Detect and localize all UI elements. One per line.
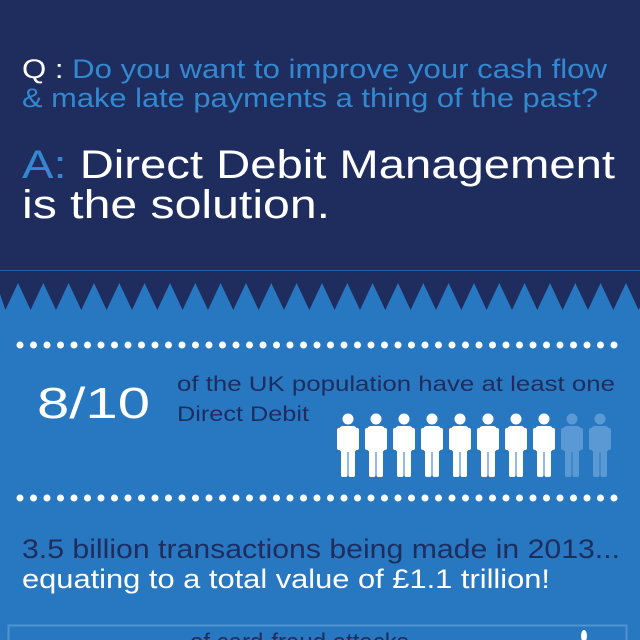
dotted divider top: [20, 342, 620, 348]
stat: transactions: [22, 534, 620, 594]
question text: Q : Do you want to improve your cash flow: [22, 54, 608, 84]
stat: transactions: equating to a total value of £1.1 trillion!: [22, 564, 550, 594]
stat: 8/10: [37, 373, 615, 428]
zigzag divider: [0, 283, 640, 320]
question text: [22, 54, 608, 113]
answer text: A: Direct Debit Management: [22, 143, 615, 187]
stat description: of the UK population have at least one: [177, 373, 615, 396]
stat: 8/10: 8/10: [37, 379, 150, 428]
icon: people pictogram 8 of 10: [337, 414, 611, 477]
panel: header question and answer: [0, 0, 640, 312]
answer text: [22, 143, 615, 227]
question text: & make late payments a thing of the past?: [22, 83, 598, 113]
stat: transactions: 3.5 billion transactions being made in 2013...: [22, 534, 620, 564]
panel: bottom box (cut off): [8, 626, 626, 640]
dotted divider bottom: [20, 494, 620, 502]
answer text: is the solution.: [22, 183, 330, 227]
stat description: [177, 373, 615, 426]
stat description: Direct Debit: [177, 403, 309, 426]
